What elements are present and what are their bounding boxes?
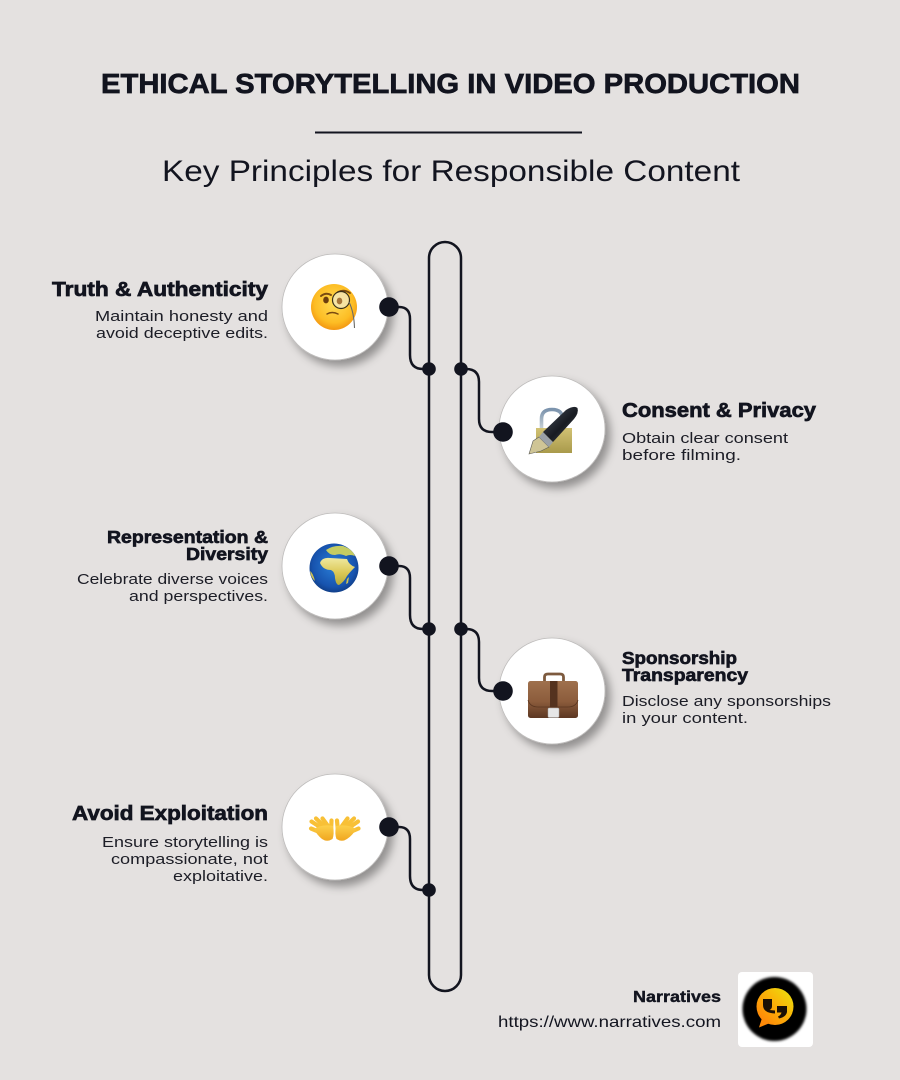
text: truth and authenticity: Maintain honesty and	[95, 308, 268, 325]
icon: locked with pen	[529, 407, 578, 454]
text: avoid exploitation: compassionate, not	[111, 851, 269, 868]
text: consent and privacy: Obtain clear consent	[622, 430, 789, 447]
icon: globe	[310, 544, 358, 592]
icon: face with monocle	[311, 284, 357, 330]
text: avoid exploitation: Ensure storytelling is	[102, 834, 268, 851]
text: sponsorship transparency: Sponsorship	[622, 648, 737, 668]
footer brand text: https://www.narratives.com	[498, 1014, 721, 1031]
text: sponsorship transparency: Disclose any sponsorships	[622, 693, 831, 710]
text: representation and diversity: Diversity	[186, 544, 268, 564]
connector: representation and diversity	[389, 566, 436, 636]
connector: consent and privacy	[454, 362, 503, 432]
panel: representation and diversity	[77, 513, 399, 619]
panel: avoid exploitation	[72, 774, 399, 885]
connector: avoid exploitation	[389, 827, 436, 897]
text: sponsorship transparency: in your content.	[622, 710, 748, 727]
text: truth and authenticity: avoid deceptive edits.	[96, 325, 268, 342]
panel: consent and privacy	[493, 376, 817, 482]
central timeline track	[429, 242, 461, 991]
node dot	[493, 681, 513, 701]
text: avoid exploitation: Avoid Exploitation	[72, 803, 268, 825]
icon: briefcase	[528, 674, 578, 718]
footer brand text: Narratives	[633, 989, 721, 1006]
panel: sponsorship transparency	[493, 638, 831, 744]
icon: open hands	[311, 818, 358, 841]
text: sponsorship transparency	[622, 648, 831, 727]
subtitle: Key Principles for Responsible Content	[162, 155, 741, 188]
text: avoid exploitation: exploitative.	[173, 868, 268, 885]
text: representation and diversity: Celebrate diverse voices	[77, 571, 268, 588]
text: consent and privacy: before filming.	[622, 447, 741, 464]
logo	[738, 972, 813, 1047]
node dot	[493, 422, 513, 442]
node dot	[379, 556, 399, 576]
text: truth and authenticity: Truth & Authenticity	[52, 279, 269, 301]
panel: truth and authenticity	[52, 254, 399, 360]
node dot	[379, 817, 399, 837]
footer brand text	[498, 989, 721, 1031]
text: representation and diversity: and perspectives.	[129, 588, 268, 605]
text: representation and diversity: Representation &	[107, 527, 268, 547]
text: consent and privacy: Consent & Privacy	[622, 400, 817, 422]
text: truth and authenticity	[52, 279, 269, 342]
node dot	[379, 297, 399, 317]
text: consent and privacy	[622, 400, 817, 464]
connector: sponsorship transparency	[454, 622, 503, 691]
text: sponsorship transparency: Transparency	[622, 665, 748, 685]
text: avoid exploitation	[72, 803, 269, 885]
text: representation and diversity	[77, 527, 268, 605]
title: ETHICAL STORYTELLING IN VIDEO PRODUCTION	[101, 68, 800, 99]
connector: truth and authenticity	[389, 307, 436, 376]
